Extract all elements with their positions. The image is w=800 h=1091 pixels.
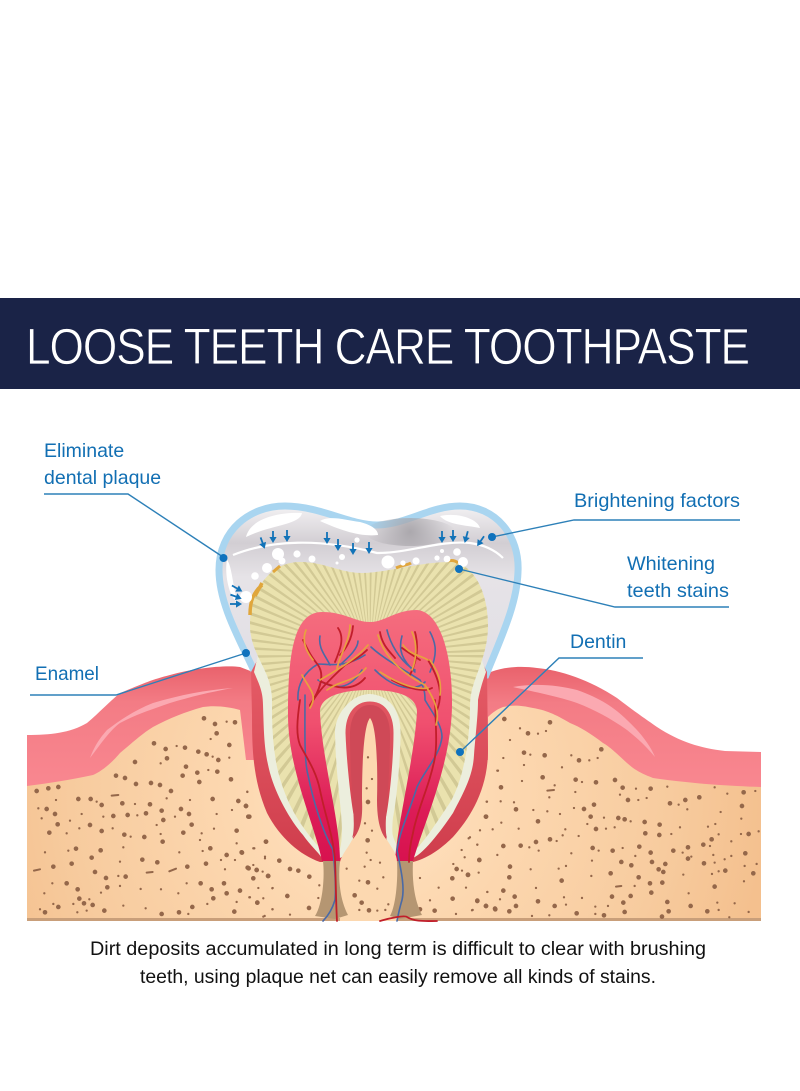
callout: Enamel	[30, 649, 250, 695]
gum highlight: right	[513, 685, 655, 757]
socket	[251, 640, 488, 862]
callout: Brightening factors: Brightening factors	[574, 490, 740, 512]
enamel white band	[233, 543, 503, 558]
callout: Eliminate dental plaque: Eliminate	[44, 440, 124, 462]
enamel grey shading	[365, 518, 455, 546]
bone pores: left	[34, 718, 278, 917]
caption	[90, 938, 706, 988]
caption: teeth, using plaque net can easily remove all kinds of stains.	[140, 966, 656, 988]
callout: Eliminate dental plaque	[44, 440, 228, 562]
callout: Dentin	[456, 631, 643, 756]
bone	[27, 695, 761, 921]
callout: Dentin: Dentin	[570, 631, 626, 653]
white particles	[240, 537, 468, 603]
callout: Eliminate dental plaque: dental plaque	[44, 467, 161, 489]
bone edge	[27, 918, 761, 921]
callout: Brightening factors	[488, 490, 740, 541]
bone pores: centre	[242, 757, 497, 916]
gum: right	[470, 667, 761, 787]
inner red ring	[350, 705, 390, 838]
enamel highlights	[226, 513, 480, 602]
callout: Whitening teeth stains: Whitening	[627, 553, 715, 575]
callout: Whitening teeth stains	[455, 553, 729, 607]
gum highlight: left	[90, 688, 233, 758]
callout: Whitening teeth stains: teeth stains	[627, 580, 729, 602]
inner white ring	[342, 698, 397, 850]
caption: Dirt deposits accumulated in long term is difficult to clear with brushing	[90, 938, 706, 960]
tooth and gum diagram	[27, 506, 761, 921]
bone pores: right	[462, 719, 759, 917]
nerves and vessels: right	[371, 630, 442, 921]
plaque deposits	[250, 561, 458, 615]
root canal: right	[390, 861, 422, 919]
root white band	[254, 625, 486, 858]
dentin	[250, 562, 488, 849]
gum: left	[27, 666, 262, 786]
root canal: left	[315, 861, 348, 919]
crown enamel	[219, 506, 518, 675]
blue arrows	[229, 530, 487, 608]
centre bone	[340, 718, 397, 921]
callout: Enamel: Enamel	[35, 663, 99, 685]
dentin rays	[240, 525, 500, 785]
title banner	[0, 298, 800, 389]
pulp	[288, 610, 452, 861]
nerves and vessels: left	[297, 625, 368, 921]
